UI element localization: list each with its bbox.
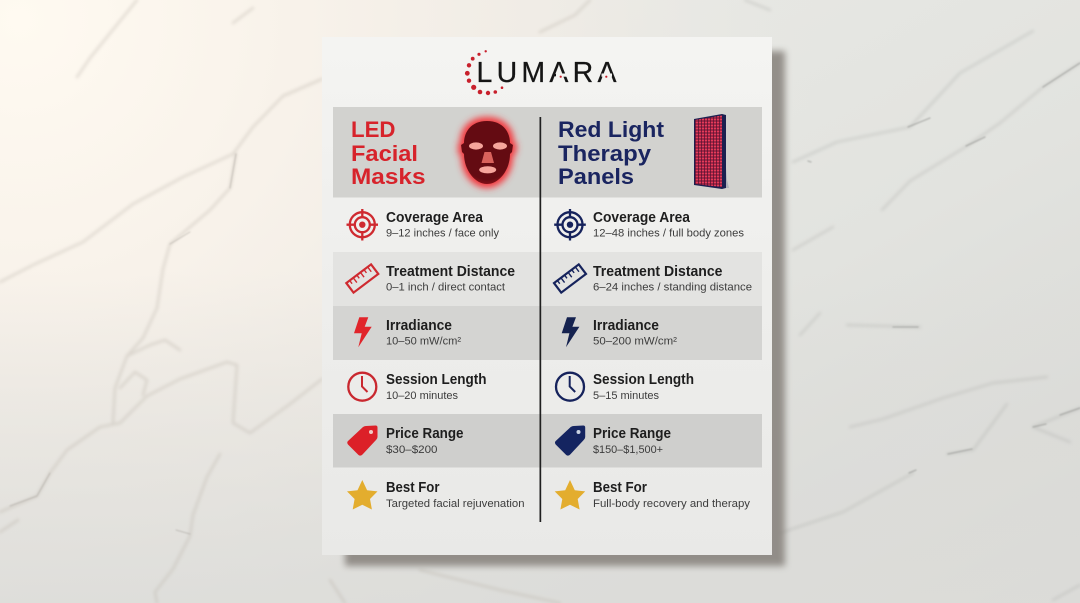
row: session length (masks) <box>348 372 486 402</box>
row: irradiance (panels): 50–200 mW/cm² <box>593 336 677 348</box>
row: best for (panels): Best For <box>593 480 647 496</box>
row: treatment distance (panels): 6–24 inches / standing distance <box>593 282 752 294</box>
header band <box>333 107 762 198</box>
column heading: LED Facial Masks: Masks <box>351 164 426 189</box>
row: irradiance (masks): 10–50 mW/cm² <box>386 336 461 348</box>
column heading: LED Facial Masks: Facial <box>351 141 418 166</box>
icon: bolt navy <box>562 317 579 347</box>
left column rows <box>346 209 524 510</box>
row: price range (masks) <box>347 426 464 456</box>
row: treatment distance (masks): 0–1 inch / direct contact <box>386 282 506 294</box>
row: session length (panels): 5–15 minutes <box>593 390 659 402</box>
row: treatment distance (masks) <box>346 264 515 294</box>
icon: target navy <box>554 209 586 240</box>
row: price range (masks): $30–$200 <box>386 444 438 456</box>
row: best for (panels): Full-body recovery and therapy <box>593 498 750 510</box>
row bands <box>333 252 762 468</box>
row: session length (masks): 10–20 minutes <box>386 390 458 402</box>
column heading: LED Facial Masks: LED <box>351 117 396 142</box>
row: treatment distance (panels) <box>554 264 752 294</box>
logo accent dots <box>560 76 607 78</box>
row: best for (panels) <box>555 480 750 510</box>
row: price range (panels) <box>555 426 671 456</box>
row: coverage area (masks) <box>346 209 499 240</box>
row: session length (panels) <box>556 372 694 402</box>
comparison card <box>322 37 772 555</box>
row: price range (panels): Price Range <box>593 426 671 442</box>
row: best for (masks): Best For <box>386 480 440 496</box>
column heading: Red Light Therapy Panels: Therapy <box>558 141 652 166</box>
column heading: Red Light Therapy Panels <box>558 117 665 189</box>
row: session length (masks): Session Length <box>386 372 486 388</box>
icon: clock red <box>348 373 376 401</box>
logo wordmark: LUMARA <box>476 57 616 89</box>
row: coverage area (panels) <box>554 209 744 240</box>
row: coverage area (masks): 9–12 inches / face only <box>386 228 499 240</box>
card shadow <box>345 51 785 566</box>
right column rows <box>554 209 752 510</box>
row: price range (panels): $150–$1,500+ <box>593 444 663 456</box>
row: treatment distance (panels): Treatment Distance <box>593 264 722 280</box>
icon: clock navy <box>556 373 584 401</box>
center divider <box>540 117 541 522</box>
icon: price tag navy <box>555 426 585 456</box>
row: best for (masks) <box>347 480 524 510</box>
row: best for (masks): Targeted facial rejuvenation <box>386 498 524 510</box>
row: session length (panels): Session Length <box>593 372 694 388</box>
row: irradiance (panels): Irradiance <box>593 318 659 334</box>
icon: bolt red <box>354 317 372 347</box>
row: coverage area (masks): Coverage Area <box>386 210 484 226</box>
column heading: LED Facial Masks <box>351 117 426 189</box>
icon: star gold <box>347 480 378 510</box>
row: treatment distance (masks): Treatment Distance <box>386 264 515 280</box>
icon: ruler navy <box>554 264 586 293</box>
row: irradiance (panels) <box>562 317 677 348</box>
logo dots <box>465 50 503 95</box>
icon: ruler red <box>346 264 378 293</box>
column heading: Red Light Therapy Panels: Red Light <box>558 117 665 142</box>
row: irradiance (masks): Irradiance <box>386 318 452 334</box>
icon: red light panel <box>694 114 729 189</box>
logo: Lumara <box>465 50 616 95</box>
row: coverage area (panels): 12–48 inches / full body zones <box>593 228 744 240</box>
icon: star gold <box>555 480 585 510</box>
icon: LED face mask <box>458 117 517 188</box>
row: price range (masks): Price Range <box>386 426 464 442</box>
row: coverage area (panels): Coverage Area <box>593 210 691 226</box>
icon: target red <box>346 209 378 240</box>
column heading: Red Light Therapy Panels: Panels <box>558 164 634 189</box>
row: irradiance (masks) <box>354 317 461 348</box>
logo crossbar masks <box>556 74 612 77</box>
icon: price tag red <box>347 426 378 456</box>
